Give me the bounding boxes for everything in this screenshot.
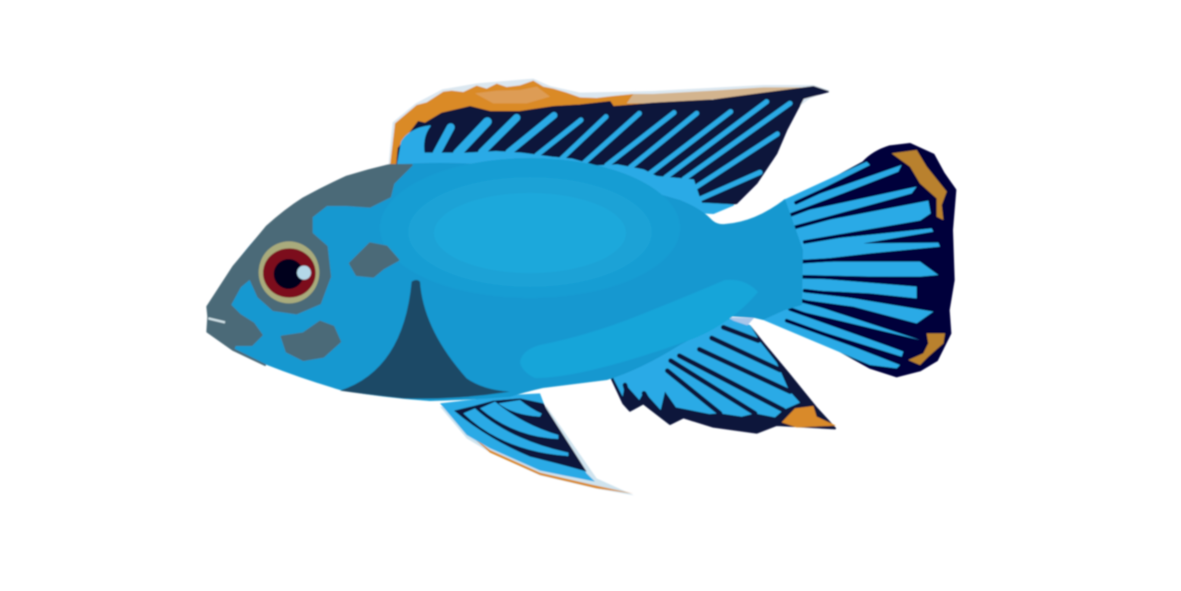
tail fin xyxy=(763,144,955,376)
tail orange patch bottom xyxy=(908,333,945,365)
tail dark rays xyxy=(787,169,940,362)
dorsal fin rays xyxy=(397,102,790,213)
body shading layers xyxy=(380,158,680,298)
gill spot xyxy=(350,243,398,277)
cheek spot xyxy=(282,322,340,360)
pectoral dark patch xyxy=(340,280,510,399)
head grey marking xyxy=(207,165,412,365)
anal fin xyxy=(612,310,836,433)
ventral fin xyxy=(440,393,634,495)
fish xyxy=(207,79,955,495)
body xyxy=(207,158,803,401)
dorsal fin xyxy=(388,79,830,213)
orange fin tip xyxy=(782,406,836,427)
lower body highlight xyxy=(520,280,758,378)
eye xyxy=(259,241,319,303)
anal fin dark rays xyxy=(625,327,790,413)
tail orange patch top xyxy=(892,150,947,220)
mouth line xyxy=(208,318,225,322)
